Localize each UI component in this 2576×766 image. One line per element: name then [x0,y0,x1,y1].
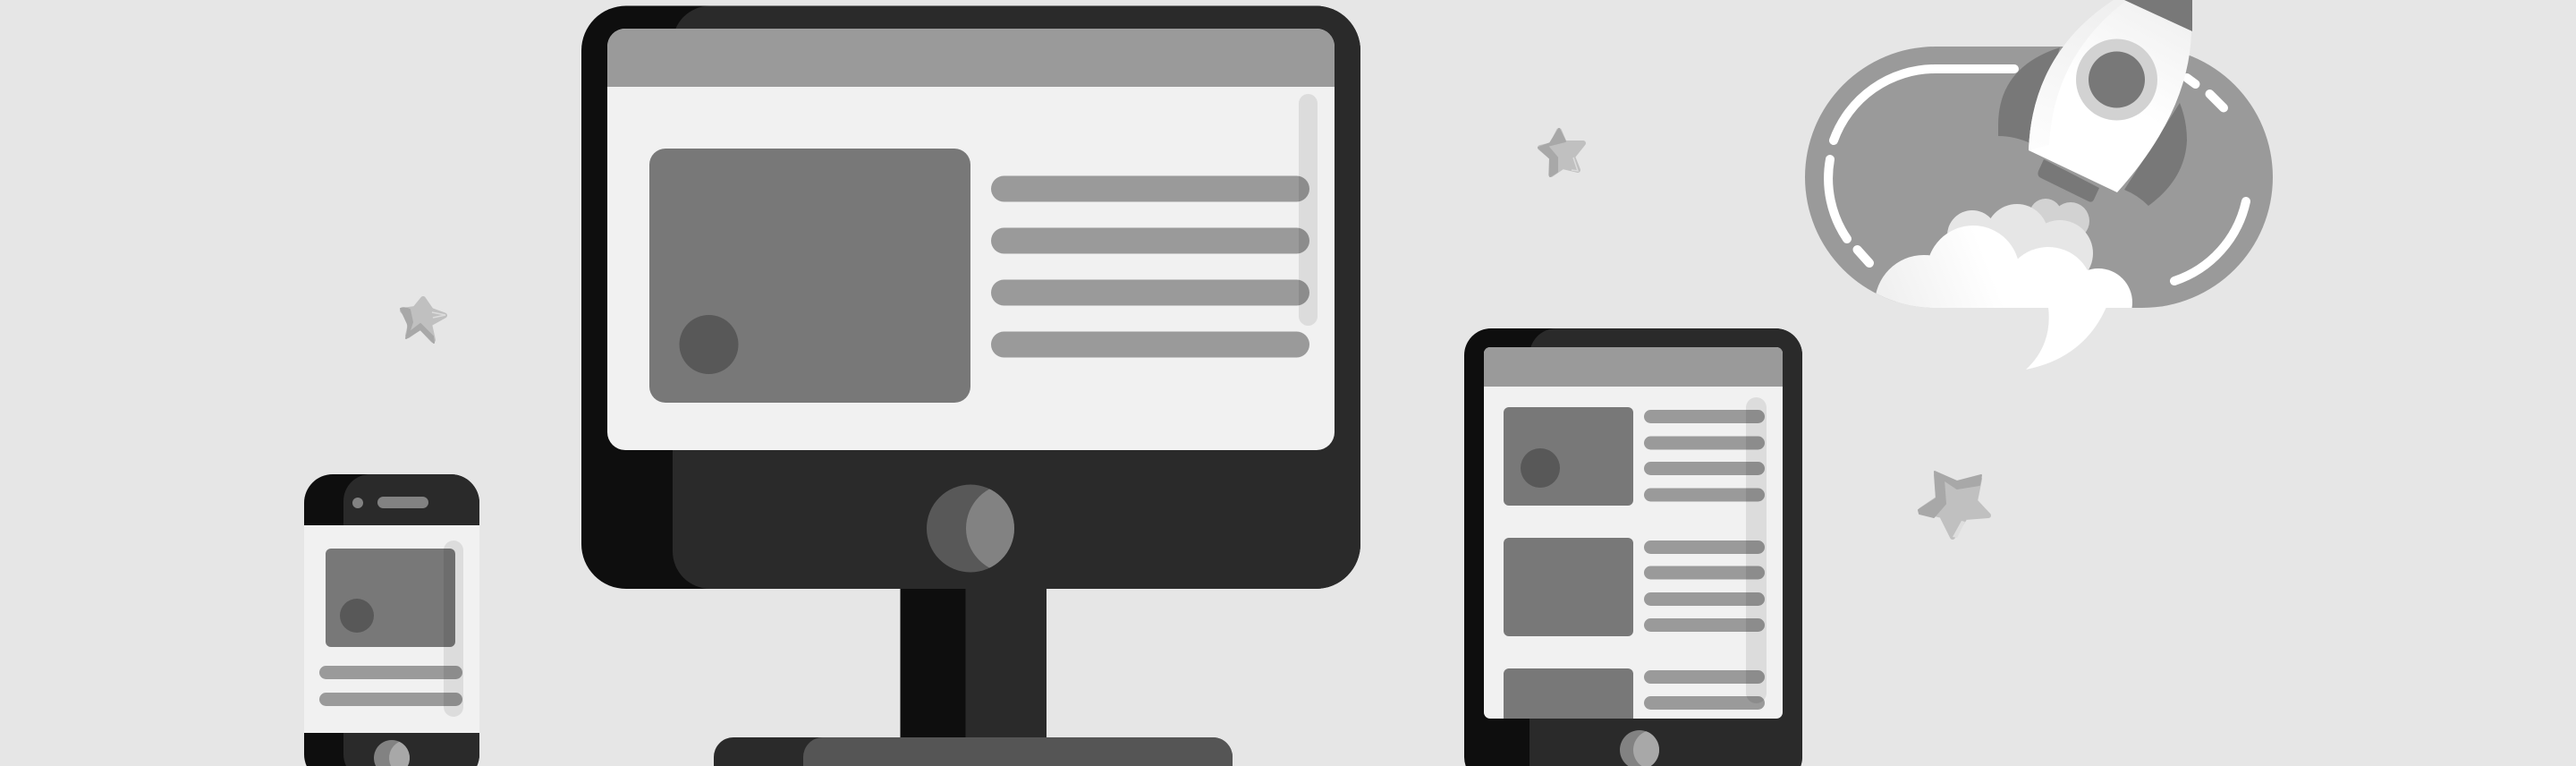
smoke cloud back [2029,199,2089,240]
phone home button [374,740,410,766]
monitor image card [649,149,970,403]
monitor body [581,5,1360,589]
rocket left fin [1998,47,2060,143]
phone camera dot [352,498,363,508]
smoke tail [2026,307,2106,370]
monitor scrollbar [1299,94,1318,326]
rocket scene [1805,0,2273,370]
phone scrollbar [444,540,463,717]
monitor header bar [607,29,1335,87]
tablet header bar [1484,347,1783,387]
tablet screen [1484,347,1783,719]
rocket body shading band [2029,0,2127,150]
star left [401,299,445,343]
phone speaker [377,497,428,508]
monitor stand [900,582,1046,739]
rocket window [2076,39,2157,120]
phone text lines [319,666,462,706]
tablet image cards [1504,407,1633,719]
monitor screen [607,29,1335,450]
star top center [1538,129,1583,176]
rocket body [2029,0,2191,192]
phone [304,474,479,766]
monitor button [927,485,1014,573]
smoke cloud front [1877,226,2132,308]
white highlight dashes [1828,69,2246,281]
smoke cloud middle [1947,204,2093,286]
tablet image circle [1521,448,1560,488]
rocket nozzle [2038,159,2099,202]
tablet [1464,328,1802,766]
star right [1919,472,1988,538]
phone image card [326,549,455,647]
monitor text lines [991,175,1309,358]
tablet scrollbar [1746,397,1767,703]
tablet body [1464,328,1802,766]
tablet text lines [1644,410,1765,710]
phone screen [304,525,479,733]
monitor base [714,737,1233,766]
phone body [304,474,479,766]
monitor [581,5,1360,766]
porthole pill backdrop [1805,47,2273,308]
rocket nose [2124,0,2192,31]
rocket right fin [2124,103,2187,206]
tablet home button [1620,730,1659,766]
